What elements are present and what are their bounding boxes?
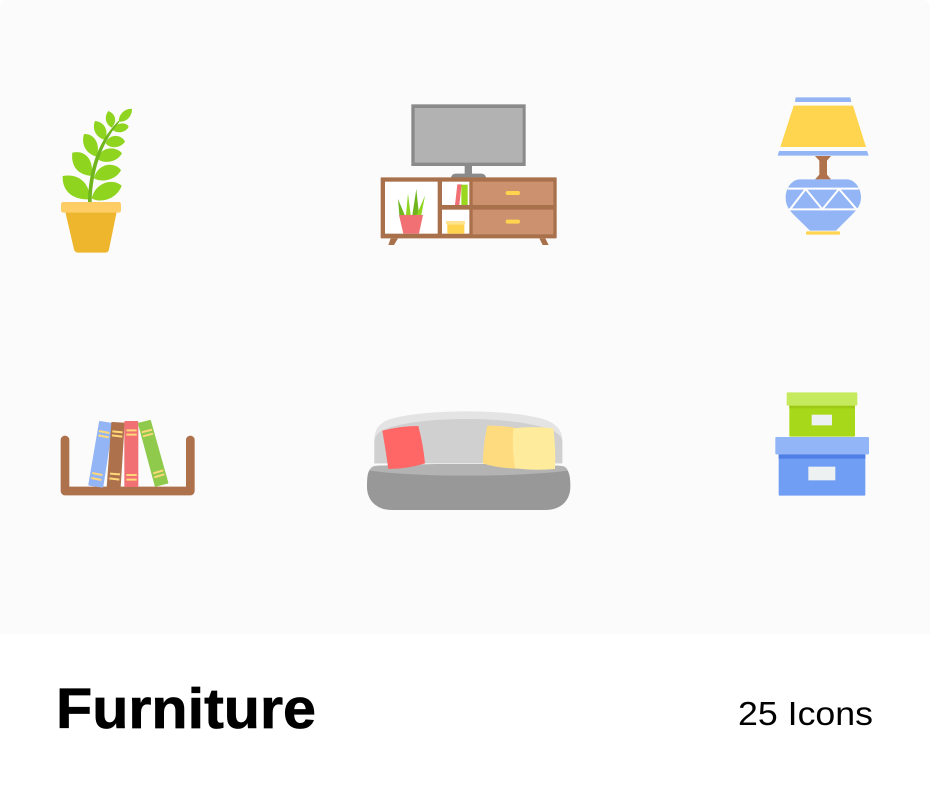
icon: TV on media cabinet — [381, 104, 557, 245]
icon: sofa with pillows — [367, 411, 570, 510]
icon count: 25 Icons — [738, 695, 873, 732]
icon: potted plant — [61, 109, 132, 253]
icon: stacked storage boxes — [775, 392, 869, 496]
title: Furniture — [56, 677, 316, 741]
icon: books on shelf — [65, 421, 190, 491]
icon: table lamp — [778, 97, 869, 235]
